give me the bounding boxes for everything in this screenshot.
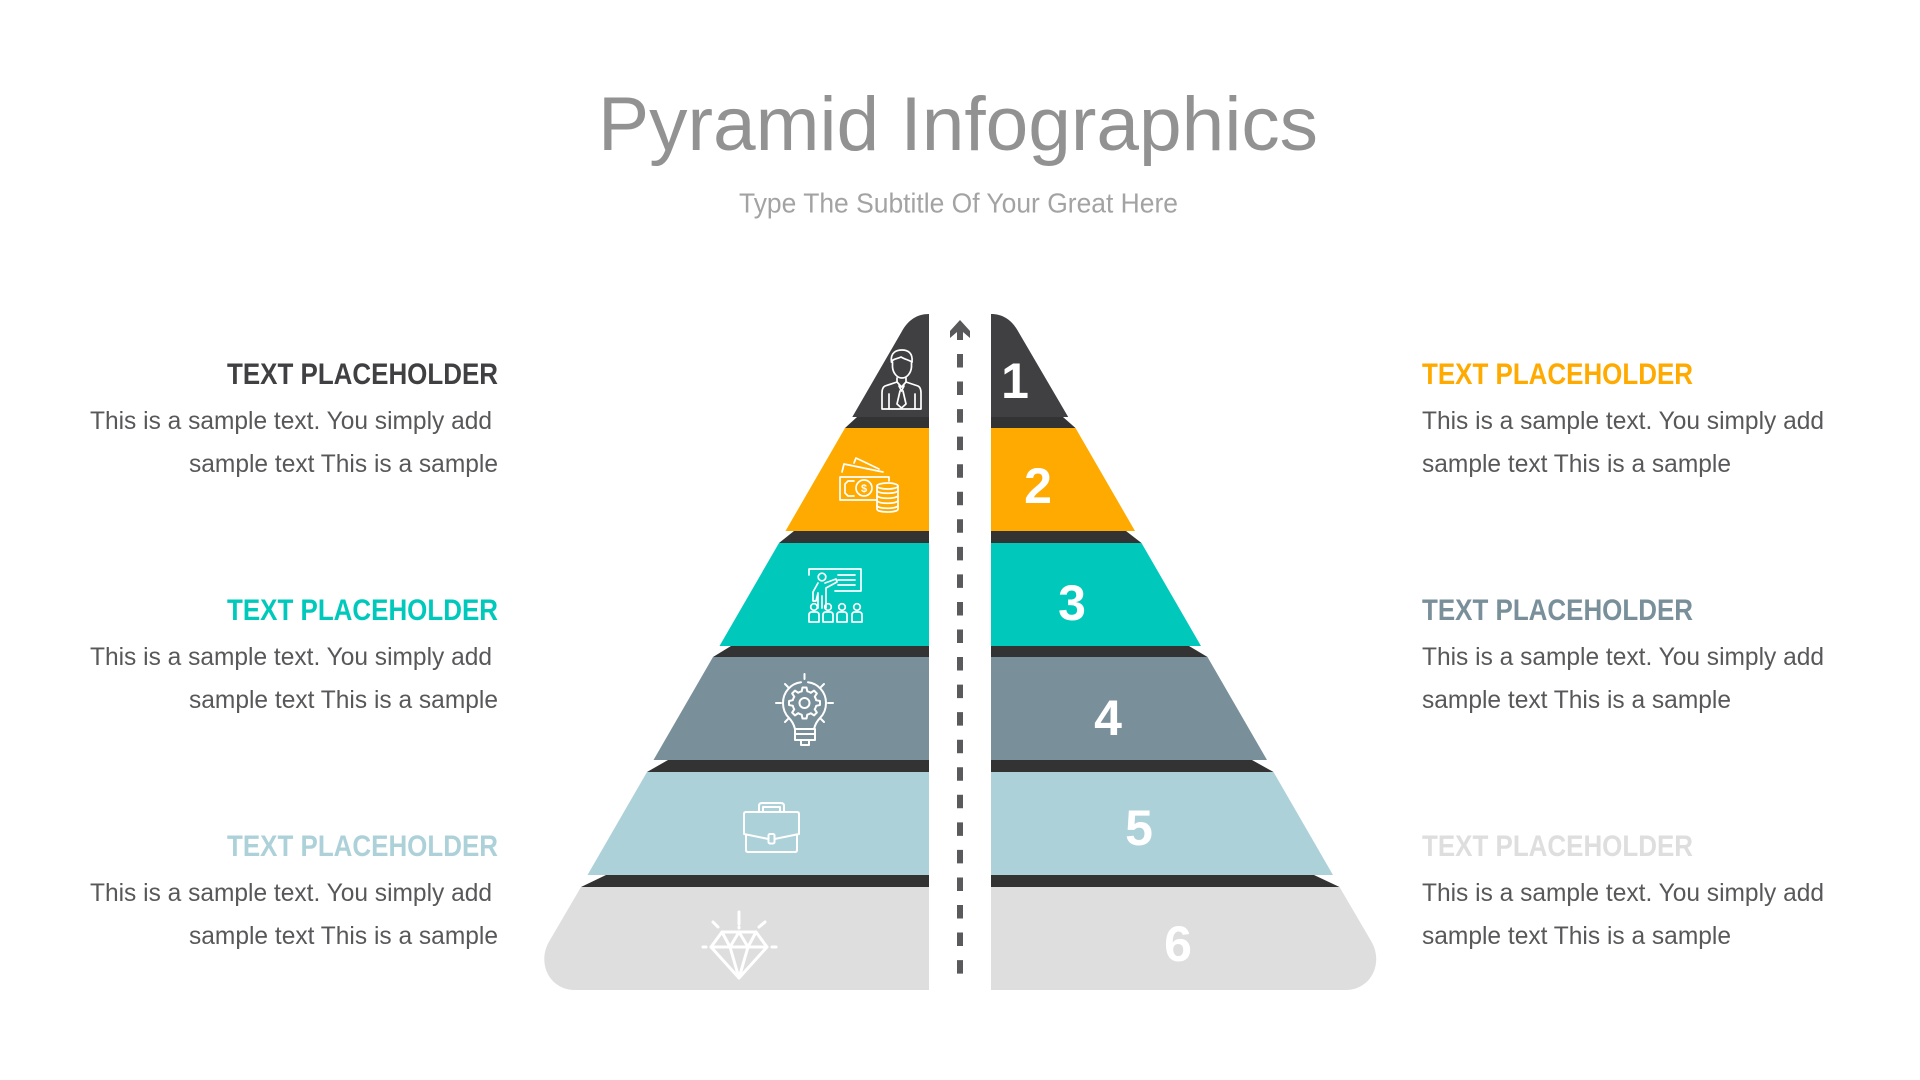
number 5: 5: [1125, 800, 1153, 856]
right text block 2: sample text This is a sample: [1422, 686, 1731, 714]
right text block 2: TEXT PLACEHOLDER: [1422, 594, 1693, 627]
left text block 2: [90, 594, 498, 714]
number 6: 6: [1164, 916, 1192, 972]
icon: money and coins: $: [861, 483, 867, 495]
dark separator bands: [581, 417, 1340, 887]
right text block 3: This is a sample text. You simply add: [1422, 879, 1824, 907]
pyramid: [544, 314, 1376, 990]
left text block 1: This is a sample text. You simply add: [90, 407, 492, 435]
left text block 1: sample text This is a sample: [189, 450, 498, 478]
right text block 2: This is a sample text. You simply add: [1422, 643, 1824, 671]
right text block 3: sample text This is a sample: [1422, 922, 1731, 950]
layer 3: [720, 543, 1201, 646]
left text block 3: [90, 830, 498, 950]
subtitle: Type The Subtitle Of Your Great Here: [739, 188, 1178, 218]
right text block 3: [1422, 830, 1824, 950]
center arrow: [950, 320, 970, 974]
icon: idea bulb with gear: [776, 674, 833, 745]
icon: money and coins: [840, 458, 898, 512]
left text block 2: This is a sample text. You simply add: [90, 643, 492, 671]
left text block 3: TEXT PLACEHOLDER: [227, 830, 498, 863]
dashed shaft: [957, 354, 963, 974]
number 3: 3: [1058, 575, 1086, 631]
left text block 1: TEXT PLACEHOLDER: [227, 358, 498, 391]
left text block 3: sample text This is a sample: [189, 922, 498, 950]
right text block 1: [1422, 358, 1824, 478]
right text block 1: TEXT PLACEHOLDER: [1422, 358, 1693, 391]
layer 2: [786, 428, 1135, 531]
title: Pyramid Infographics: [598, 82, 1318, 167]
arrow head: [950, 320, 970, 340]
icon: presentation: [809, 569, 862, 622]
left text block 2: sample text This is a sample: [189, 686, 498, 714]
right text block 2: [1422, 594, 1824, 714]
right text block 3: TEXT PLACEHOLDER: [1422, 830, 1693, 863]
icon: diamond: [703, 912, 776, 978]
left text block 3: This is a sample text. You simply add: [90, 879, 492, 907]
left text block 1: [90, 358, 498, 478]
number 1: 1: [1001, 353, 1029, 409]
right text block 1: This is a sample text. You simply add: [1422, 407, 1824, 435]
layer 1: [852, 314, 1068, 417]
number 2: 2: [1024, 458, 1052, 514]
left text block 2: TEXT PLACEHOLDER: [227, 594, 498, 627]
layer 6: [544, 887, 1376, 990]
number 4: 4: [1094, 690, 1122, 746]
icon: businessman: [882, 350, 921, 409]
right text block 1: sample text This is a sample: [1422, 450, 1731, 478]
layer 5: [588, 772, 1333, 875]
layer 4: [654, 657, 1267, 760]
icon: briefcase: [744, 803, 799, 852]
